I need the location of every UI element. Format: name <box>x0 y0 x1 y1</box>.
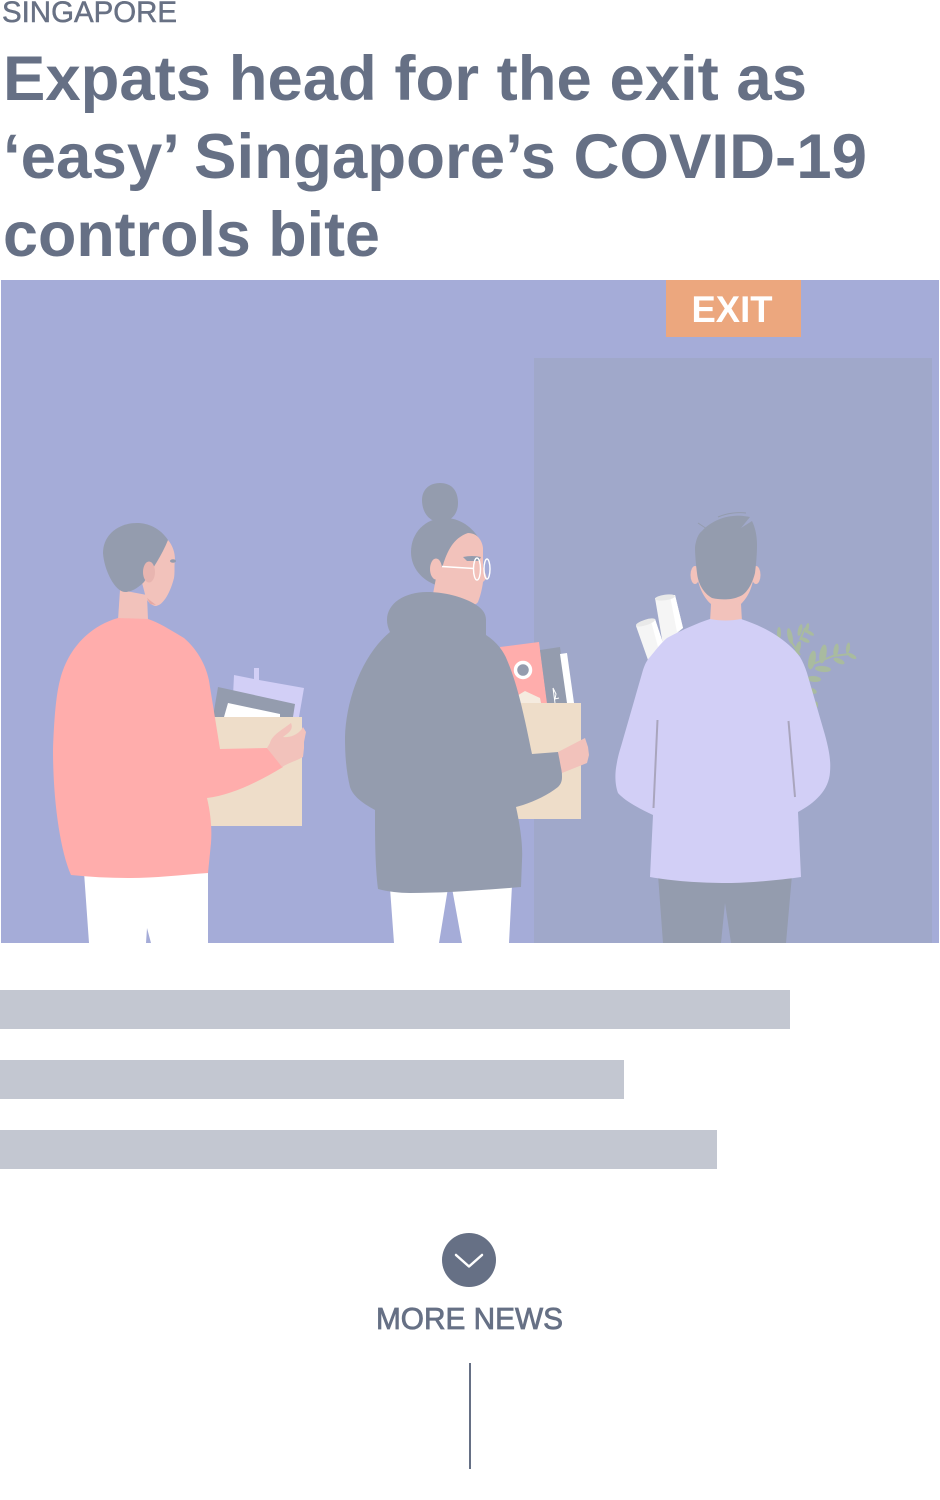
headline <box>3 44 867 270</box>
eye <box>170 559 176 563</box>
face <box>140 540 175 606</box>
headline: ‘easy’ Singapore’s COVID-19 <box>3 122 867 192</box>
hair bun <box>422 483 458 522</box>
trousers <box>658 875 792 943</box>
headline: controls bite <box>3 200 380 270</box>
plant <box>777 623 857 708</box>
doorway <box>534 358 932 943</box>
ear <box>143 562 155 582</box>
hair <box>695 516 757 599</box>
glasses <box>442 558 490 580</box>
sweater creases <box>654 720 795 808</box>
eyebrow <box>463 556 481 561</box>
wall background <box>1 280 939 943</box>
person: right man in lilac sweater seen from behind <box>615 513 857 943</box>
icon: down chevron button <box>442 1233 496 1287</box>
sweater <box>615 619 830 883</box>
box contents <box>213 668 304 717</box>
vertical scroll line <box>469 1363 471 1469</box>
ears <box>690 566 700 584</box>
headline: Expats head for the exit as <box>3 44 807 114</box>
cardboard box <box>510 703 581 819</box>
neck <box>118 590 148 620</box>
hoodie <box>345 592 562 893</box>
hand <box>558 738 589 773</box>
illustration panel: three people leaving with boxes <box>1 280 939 943</box>
trousers <box>390 885 512 943</box>
exit sign <box>666 280 801 337</box>
cardboard box <box>205 717 302 826</box>
neck and jaw <box>697 575 754 622</box>
hair <box>103 523 168 592</box>
folders in box <box>500 642 574 703</box>
trousers <box>84 868 208 943</box>
placeholder text bars <box>0 990 790 1169</box>
hand <box>267 723 306 767</box>
exit sign: EXIT <box>692 289 773 330</box>
hair wisps <box>698 513 746 529</box>
sweater <box>53 618 283 878</box>
person: left man in coral sweater with box <box>53 523 306 943</box>
person: middle woman in grey hoodie with box <box>345 483 589 943</box>
ear <box>430 558 442 580</box>
hair <box>411 518 478 585</box>
paper rolls <box>635 593 683 660</box>
face and neck <box>433 533 487 605</box>
more news label: MORE NEWS <box>376 1301 563 1336</box>
